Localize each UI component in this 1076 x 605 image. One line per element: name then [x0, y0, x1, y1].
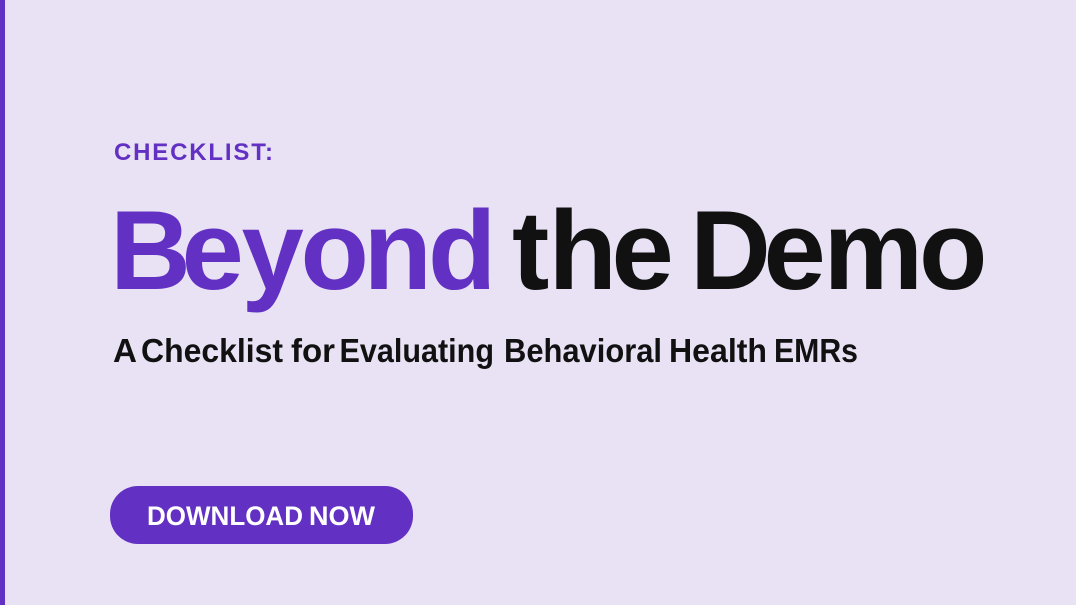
title [110, 188, 987, 313]
subtitle: A [113, 332, 137, 369]
left accent bar [0, 0, 5, 605]
eyebrow label: CHECKLIST: [114, 139, 273, 166]
subtitle: Health [669, 332, 767, 369]
subtitle [113, 332, 858, 369]
title word: Beyond: Beyond [110, 188, 496, 313]
subtitle: Behavioral [504, 332, 662, 369]
button label: NOW [309, 501, 376, 531]
button background [110, 486, 413, 544]
subtitle: Evaluating [340, 332, 494, 369]
subtitle: EMRs [774, 332, 858, 369]
download button [110, 486, 413, 544]
title words: the Demo: the Demo [512, 188, 987, 313]
subtitle: for [291, 332, 335, 369]
subtitle: Checklist [141, 332, 283, 369]
button label: DOWNLOAD [147, 501, 303, 531]
